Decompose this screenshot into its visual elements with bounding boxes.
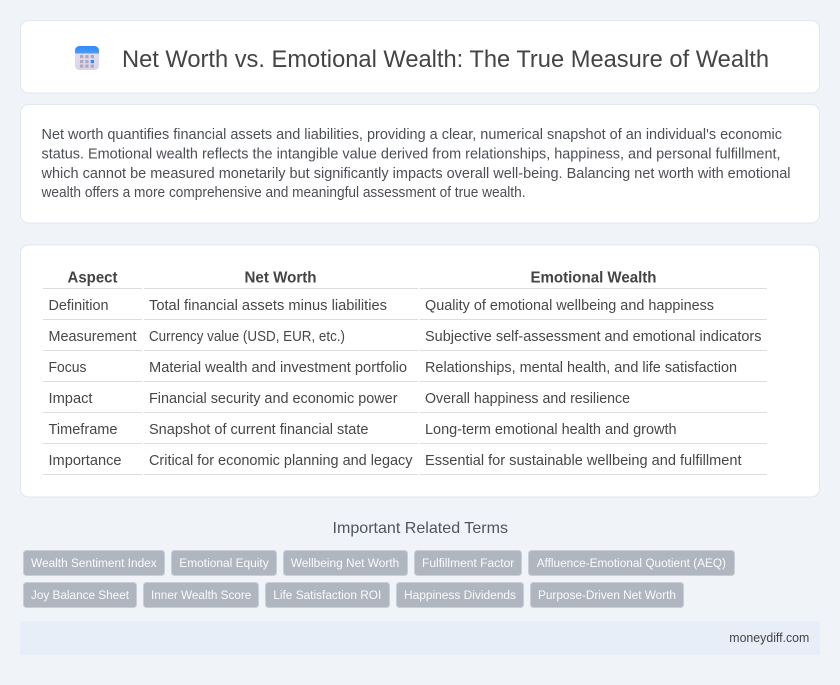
intro paragraph: wealth offers a more comprehensive and meaningful assessment of true wealth. bbox=[41, 185, 525, 201]
row: Timeframe bbox=[48, 422, 676, 438]
intro paragraph bbox=[41, 127, 790, 201]
row: Importance: Critical for economic planning and legacy bbox=[149, 453, 413, 469]
tag: Life Satisfaction ROI: Life Satisfaction ROI bbox=[273, 588, 381, 602]
row: Timeframe: Timeframe bbox=[48, 422, 118, 438]
tag: Fulfillment Factor bbox=[414, 550, 522, 576]
tag: Emotional Equity bbox=[172, 550, 276, 576]
tag: Purpose-Driven Net Worth bbox=[530, 582, 684, 608]
row: Focus: Relationships, mental health, and life satisfaction bbox=[425, 360, 737, 376]
panel: introduction bbox=[20, 104, 820, 223]
row: Measurement bbox=[48, 329, 762, 345]
icon: calendar bbox=[75, 46, 99, 70]
row: Impact: Impact bbox=[48, 391, 92, 407]
row: Definition: Definition bbox=[48, 298, 108, 314]
footer bbox=[20, 621, 820, 655]
row: Timeframe: Snapshot of current financial state bbox=[149, 422, 368, 438]
row: Definition bbox=[48, 298, 714, 314]
row: Measurement: Measurement bbox=[48, 329, 136, 345]
row: Timeframe: Long-term emotional health and growth bbox=[425, 422, 676, 438]
table header row: Emotional Wealth bbox=[530, 270, 656, 286]
row: Measurement: Subjective self-assessment and emotional indicators bbox=[425, 329, 762, 345]
row: Importance: Importance bbox=[48, 453, 122, 469]
footer site name: moneydiff.com bbox=[729, 630, 809, 645]
tag: Affluence-Emotional Quotient (AEQ): Affluence-Emotional Quotient (AEQ) bbox=[537, 556, 726, 570]
heading: related terms: Important Related Terms bbox=[332, 520, 508, 537]
table header row: Aspect bbox=[68, 270, 118, 286]
table header row: Net Worth bbox=[244, 270, 316, 286]
tag: Wealth Sentiment Index bbox=[24, 550, 164, 576]
row: Impact bbox=[48, 391, 630, 407]
table header row bbox=[68, 270, 656, 286]
row: Focus bbox=[48, 360, 737, 376]
tag: Wellbeing Net Worth bbox=[284, 550, 408, 576]
row: Measurement: Currency value (USD, EUR, etc.) bbox=[149, 329, 345, 345]
row: Importance: Essential for sustainable wellbeing and fulfillment bbox=[425, 453, 742, 469]
row: Impact: Overall happiness and resilience bbox=[425, 391, 630, 407]
row: Impact: Financial security and economic power bbox=[149, 391, 398, 407]
tag: Emotional Equity: Emotional Equity bbox=[179, 556, 269, 570]
intro paragraph: status. Emotional wealth reflects the intangible value derived from relationships, happiness, and personal fulfillment, bbox=[42, 146, 780, 162]
tag: Inner Wealth Score bbox=[144, 582, 258, 608]
panel: comparison table bbox=[20, 245, 820, 497]
row: Focus: Material wealth and investment portfolio bbox=[149, 360, 407, 376]
tag: Happiness Dividends bbox=[396, 582, 524, 608]
intro paragraph: Net worth quantifies financial assets and liabilities, providing a clear, numerical snapshot of an individual's economic bbox=[42, 127, 782, 143]
tag: Inner Wealth Score: Inner Wealth Score bbox=[151, 588, 251, 602]
tag: Wealth Sentiment Index: Wealth Sentiment Index bbox=[31, 556, 157, 570]
intro paragraph: which cannot be measured monetarily but significantly impacts overall well-being. Balancing net worth with emotional bbox=[41, 166, 790, 182]
tag: Affluence-Emotional Quotient (AEQ) bbox=[528, 550, 734, 576]
row: Importance bbox=[48, 453, 742, 469]
tag: Life Satisfaction ROI bbox=[266, 582, 390, 608]
tag: Joy Balance Sheet: Joy Balance Sheet bbox=[31, 588, 130, 602]
tag: Happiness Dividends: Happiness Dividends bbox=[404, 588, 516, 602]
header card bbox=[20, 20, 820, 93]
tag: Wellbeing Net Worth: Wellbeing Net Worth bbox=[291, 556, 399, 570]
row: Definition: Quality of emotional wellbeing and happiness bbox=[425, 298, 714, 314]
tag: Purpose-Driven Net Worth: Purpose-Driven Net Worth bbox=[538, 588, 676, 602]
title: Net Worth vs. Emotional Wealth: The True Measure of Wealth bbox=[122, 46, 769, 73]
row: Definition: Total financial assets minus liabilities bbox=[149, 298, 387, 314]
related term tags bbox=[24, 550, 734, 608]
tag: Joy Balance Sheet bbox=[24, 582, 136, 608]
row: Focus: Focus bbox=[48, 360, 86, 376]
tag: Fulfillment Factor: Fulfillment Factor bbox=[422, 556, 514, 570]
